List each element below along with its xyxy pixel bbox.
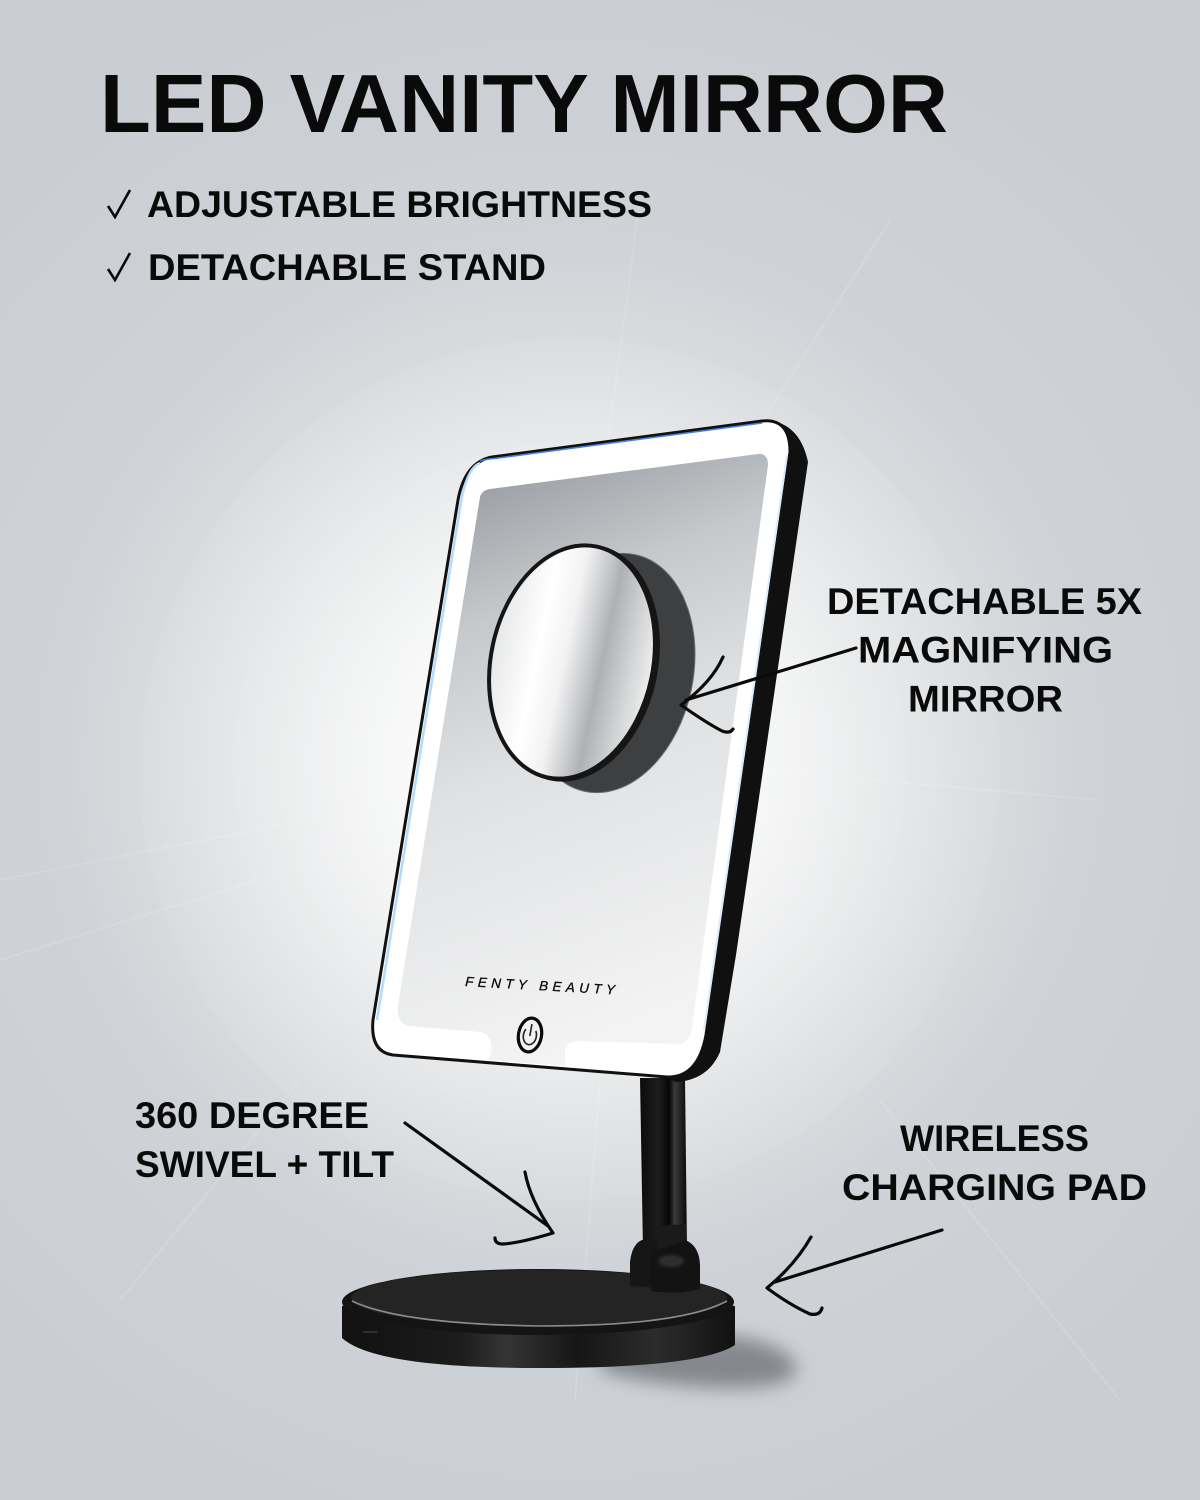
swivel joint xyxy=(630,1224,700,1293)
icon: check mark 2 xyxy=(108,253,130,280)
callout text: MIRROR xyxy=(908,678,1063,720)
brand wordmark: FENTY BEAUTY xyxy=(465,974,616,997)
magnifying mirror xyxy=(468,530,676,794)
callout text: SWIVEL + TILT xyxy=(135,1144,394,1185)
mirror LED frame xyxy=(373,421,790,1077)
callout: wireless charging pad xyxy=(767,1118,1147,1314)
magnifier back housing xyxy=(504,537,716,809)
stand stem xyxy=(640,1078,687,1250)
callout text xyxy=(842,1118,1147,1208)
product: vanity mirror with stand xyxy=(342,420,808,1368)
callout: 360 degree swivel + tilt xyxy=(135,1095,553,1244)
base shadow xyxy=(600,1336,797,1388)
arrow xyxy=(767,1230,942,1314)
LED blue edge xyxy=(377,423,787,1030)
callout text: 360 DEGREE xyxy=(135,1095,369,1136)
mirror back edge xyxy=(660,420,808,1082)
callout text: MAGNIFYING xyxy=(858,630,1113,670)
mirror glass panel xyxy=(398,454,768,1066)
icon: power button xyxy=(516,1016,544,1054)
callout: detachable 5x magnifying mirror xyxy=(681,581,1142,732)
magnifier dark rim xyxy=(469,528,681,798)
arrow xyxy=(681,648,856,732)
callout text: CHARGING PAD xyxy=(842,1167,1147,1208)
arrow xyxy=(405,1123,553,1244)
callout text xyxy=(827,581,1142,720)
feature list xyxy=(108,184,652,288)
callout text: DETACHABLE 5X xyxy=(827,581,1142,622)
callout text: WIRELESS xyxy=(900,1118,1089,1159)
feature: detachable stand: DETACHABLE STAND xyxy=(148,247,546,288)
icon: check mark 1 xyxy=(108,190,130,217)
stand base xyxy=(342,1269,735,1368)
title: LED VANITY MIRROR xyxy=(100,57,948,150)
feature: adjustable brightness: ADJUSTABLE BRIGHTNESS xyxy=(147,184,652,225)
callout text xyxy=(135,1095,394,1185)
